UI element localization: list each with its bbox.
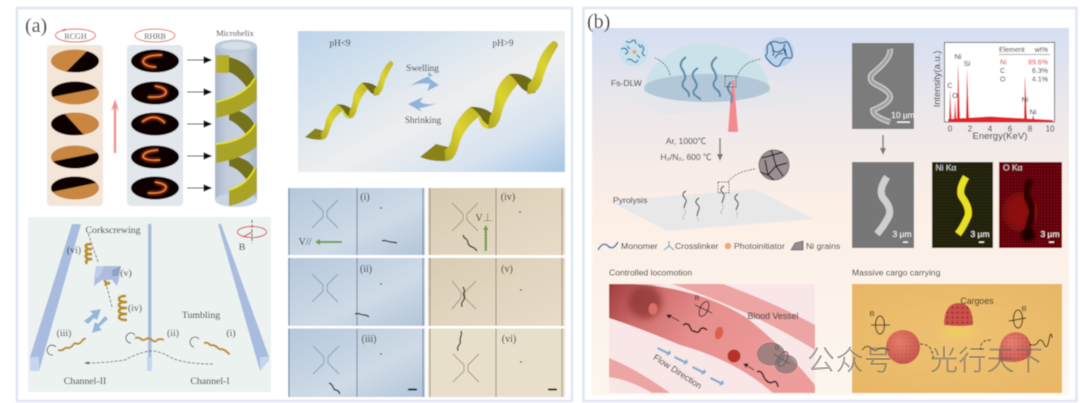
path: dashed trajectory xyxy=(88,233,213,364)
arrow: green V perpendicular xyxy=(483,225,489,251)
swimmers and paths xyxy=(862,334,1052,358)
labels: channel schematic: (iv) xyxy=(128,303,142,314)
watermark text 2: 光行天下 xyxy=(930,339,1043,379)
legend: Crosslinker xyxy=(675,241,719,251)
helix: contracted xyxy=(305,61,393,140)
arrows: dashed to insets xyxy=(655,58,761,77)
EDS map: Ni: 3 µm xyxy=(970,229,990,239)
element table: wt% xyxy=(1034,47,1048,54)
element table: Ni xyxy=(1000,60,1007,66)
panel: blood vessel xyxy=(609,284,815,393)
SEM: as-printed helix xyxy=(852,43,915,129)
schematic: Pyrolysis xyxy=(609,182,814,231)
arrows: hologram to helix xyxy=(187,57,211,191)
labels: left column xyxy=(299,192,376,345)
labels: pH response: pH<9 xyxy=(329,38,351,48)
legend: Photoinitiator xyxy=(734,241,785,251)
labels: pH response: Shrinking xyxy=(405,115,442,125)
magnetic field icons xyxy=(695,300,790,368)
label: Flow Direction: Flow Direction xyxy=(652,352,704,391)
element table: 4.1% xyxy=(1032,76,1048,84)
caption: Microhelix: Microhelix xyxy=(216,28,255,38)
magnetic field icons xyxy=(871,310,1026,334)
channel walls xyxy=(30,224,269,371)
EDS map: Ni: Ni Kα xyxy=(936,162,957,172)
inset: crosslinked network xyxy=(764,37,794,67)
panel: RCGH holograms xyxy=(47,45,103,206)
label: B lower: B xyxy=(774,343,780,352)
labels: left column: (ii) xyxy=(360,264,372,275)
labels: pH response xyxy=(329,38,514,125)
caption: RHRB with rotation arrow: RHRB xyxy=(144,32,166,41)
labels: pH response: Swelling xyxy=(406,63,439,73)
label: B upper: B xyxy=(694,293,700,302)
spectrum peaks xyxy=(948,63,1053,122)
labels: channel schematic: B xyxy=(239,242,246,253)
labels: channel schematic: (i) xyxy=(226,328,236,339)
schematic: Pyrolysis: Pyrolysis xyxy=(613,195,647,205)
worms: tumbling xyxy=(58,338,230,354)
axis labels: 10 xyxy=(1046,124,1055,134)
labels: channel schematic: (vi) xyxy=(67,245,81,256)
x-shaped slits xyxy=(452,203,479,382)
peak labels: Ni xyxy=(954,52,962,61)
EDS chart: Energy(KeV) xyxy=(973,131,1027,142)
panel: b xyxy=(584,8,1076,401)
micrographs: right column xyxy=(427,188,566,397)
inner gradient background xyxy=(592,28,1069,395)
arrow: green V parallel xyxy=(315,239,342,245)
micrographs: left column xyxy=(287,188,426,397)
arrows: flow xyxy=(657,347,724,386)
arrow: process down xyxy=(717,138,723,161)
labels: right column: V⊥ xyxy=(475,213,493,224)
axis labels: 4 xyxy=(988,124,993,134)
legend: Monomer xyxy=(621,241,658,251)
element table xyxy=(999,47,1050,84)
labels: right column: (iv) xyxy=(501,192,515,203)
watermark text: 公众号 xyxy=(807,339,893,379)
element table: 6.3% xyxy=(1032,68,1048,75)
panel: a xyxy=(17,8,572,401)
labels: left column: V// xyxy=(299,237,312,248)
EDS map: O: O Kα xyxy=(1003,162,1023,172)
legend xyxy=(598,241,841,251)
label: b: (b) xyxy=(587,11,610,33)
labels: right column: (v) xyxy=(501,264,513,275)
labels: channel schematic: (ii) xyxy=(167,328,179,339)
peak labels: C xyxy=(947,81,953,90)
text: process conditions: H₂/N₂, 600 ℃ xyxy=(660,152,712,162)
EDS map: O xyxy=(999,162,1062,248)
label: Cargoes: Cargoes xyxy=(960,296,994,306)
inset: monomer network xyxy=(620,38,648,66)
labels: channel schematic: Channel-I xyxy=(190,376,230,387)
inset: Ni grains xyxy=(759,150,789,180)
axis labels: 6 xyxy=(1008,124,1013,134)
microhelix in cylinder xyxy=(215,40,257,207)
peak labels xyxy=(947,52,1037,116)
axis labels: 8 xyxy=(1028,124,1033,134)
caption: RCGH with rotation arrow xyxy=(56,28,96,42)
labels: left column: (i) xyxy=(360,192,370,203)
slit block xyxy=(94,266,121,286)
labels: right column xyxy=(475,192,516,345)
arrow: swelling xyxy=(410,72,439,91)
EDS chart: Intensity(a.u.) xyxy=(931,51,942,107)
arrow: SEM down xyxy=(880,135,886,155)
label: a: (a) xyxy=(25,15,47,37)
axis labels: 0 xyxy=(948,124,953,134)
legend: Ni grains xyxy=(806,241,841,251)
labels: channel schematic: (iii) xyxy=(57,328,71,339)
helix: expanded xyxy=(420,41,558,161)
peak labels: Si xyxy=(964,59,971,68)
element table: Element xyxy=(999,47,1025,54)
axis labels: 2 xyxy=(968,124,973,134)
swimmers and scale bar xyxy=(329,208,417,394)
axis labels xyxy=(948,124,1055,134)
peak labels: Ni xyxy=(1029,108,1037,116)
EDS chart xyxy=(931,42,1055,142)
element table: O xyxy=(1000,76,1006,84)
arrows: blue reversal xyxy=(84,309,108,333)
rotation marks xyxy=(47,333,199,355)
element table: C xyxy=(1000,68,1005,75)
motion arrows xyxy=(667,315,754,370)
panel: cargo carrying xyxy=(852,284,1062,393)
arrowhead: trajectory xyxy=(84,362,89,364)
heading: controlled locomotion: Controlled locomotion xyxy=(609,268,692,278)
arrow: dashed to grains xyxy=(728,169,755,182)
labels: channel schematic: Tumbling xyxy=(182,310,220,321)
panel: channel schematic xyxy=(28,217,271,392)
labels: channel schematic: Channel-II xyxy=(64,376,106,387)
caption: RHRB with rotation arrow xyxy=(135,29,175,42)
label: B right: B xyxy=(1021,304,1027,313)
peak labels: Ni xyxy=(1021,95,1029,104)
labels: channel schematic: Corkscrewing xyxy=(86,225,141,236)
labels: pH response: pH>9 xyxy=(492,38,514,48)
icon: rotating B field xyxy=(238,220,266,243)
SEM: pyrolyzed helix: 3 µm xyxy=(892,229,912,239)
label: Blood Vessel: Blood Vessel xyxy=(748,311,798,321)
x-shaped slits xyxy=(312,200,339,374)
labels: left column: (iii) xyxy=(362,334,376,345)
SEM: pyrolyzed helix xyxy=(852,162,914,248)
schematic: Fs-DLW: Fs-DLW xyxy=(611,78,643,88)
icon: chat bubbles xyxy=(757,342,798,374)
peak labels: O xyxy=(952,91,958,100)
schematic: Fs-DLW xyxy=(605,43,810,132)
labels: channel schematic: (v) xyxy=(120,268,132,279)
swimmers xyxy=(683,324,778,387)
text: process conditions: Ar, 1000℃ xyxy=(666,136,707,146)
panel: RHRB intensity images xyxy=(127,45,183,206)
SEM: as-printed helix: 10 µm xyxy=(891,110,915,120)
text: process conditions xyxy=(660,136,712,162)
caption: RCGH with rotation arrow: RCGH xyxy=(64,32,87,41)
worms: corkscrew coils xyxy=(86,244,127,320)
label: B left: B xyxy=(869,309,875,318)
watermark xyxy=(757,339,1043,379)
cargoes xyxy=(886,303,1031,364)
labels: channel schematic xyxy=(57,225,246,387)
EDS map: Ni xyxy=(932,162,993,248)
EDS map: O: 3 µm xyxy=(1040,229,1060,239)
panel: pH response xyxy=(298,31,565,172)
arrow: red upward xyxy=(111,99,119,153)
heading: massive cargo carrying: Massive cargo carrying xyxy=(852,268,941,278)
element table: 89.6% xyxy=(1028,60,1048,66)
arrow: shrinking xyxy=(408,97,438,112)
labels: right column: (vi) xyxy=(502,334,516,345)
swimmers and scale bar xyxy=(458,212,557,390)
